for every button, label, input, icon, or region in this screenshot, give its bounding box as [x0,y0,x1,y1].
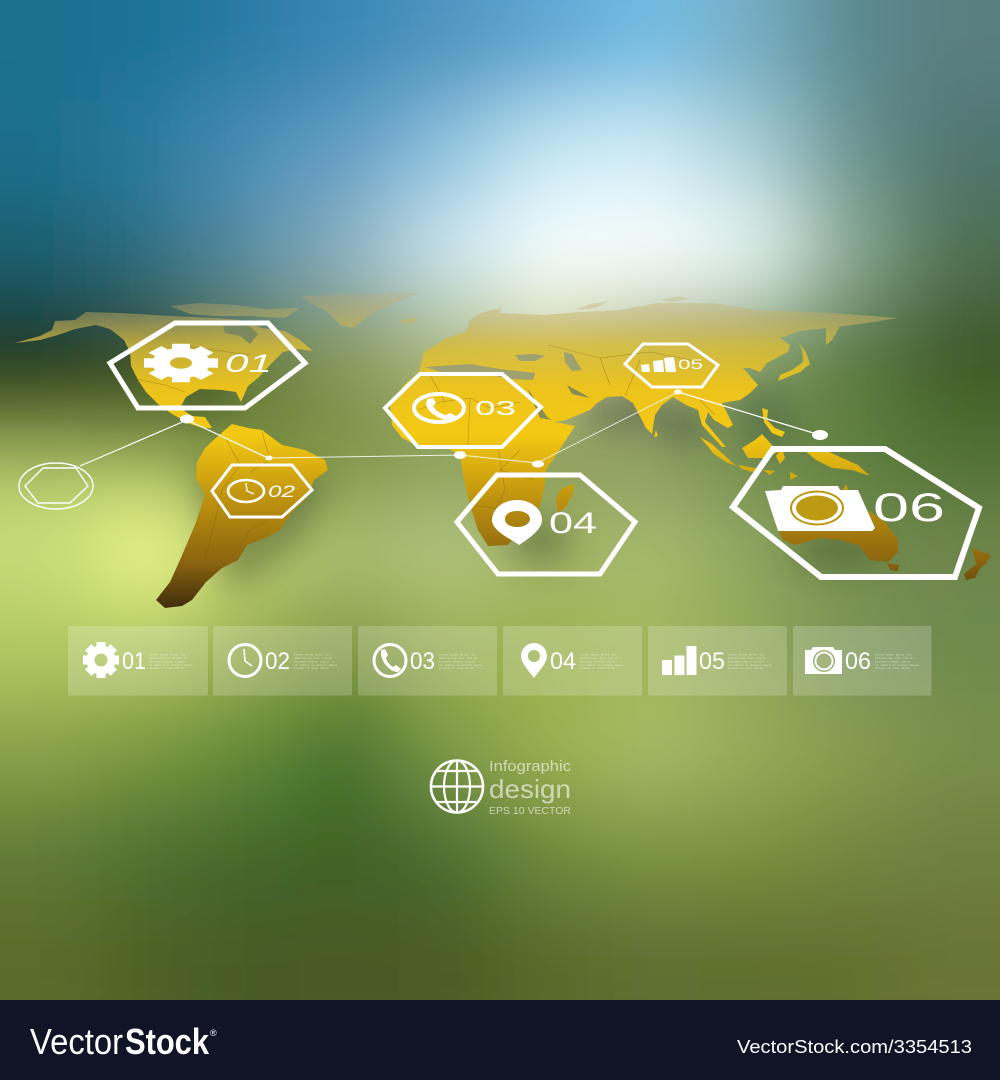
lorem text [875,652,919,670]
lorem text [294,652,338,670]
inland seas [222,322,590,420]
icon: camera [805,647,842,674]
panel: legend 02 [213,626,352,696]
icon: gear [83,642,119,678]
logo: Vector [30,1021,123,1062]
lorem text: Lorem ipsum dolor sit [580,652,617,656]
hexagon 06 [733,449,979,577]
world map shadow [181,385,881,590]
lorem text: aliqua ut enim minim [875,666,910,670]
hexagon 05 [625,344,718,387]
lorem text: Eiusmod tempor incid [875,660,910,664]
footer bar [0,1000,1000,1080]
panel: legend 05: 05 [699,648,725,675]
hexagon 02 [212,465,312,517]
hexagon 05: 05 [678,357,703,372]
icon: map pin [521,643,547,678]
lorem text: Eiusmod tempor incid [294,660,329,664]
lorem text: Adipiscing elit sed do [149,656,187,660]
icon: clock [228,480,264,502]
panel: legend 02: 02 [265,648,290,675]
logo: ® [210,1028,217,1038]
lorem text: Eiusmod tempor incid [580,660,615,664]
icon: globe [431,760,483,812]
lorem text: Eiusmod tempor incid [149,660,184,664]
lorem text [580,652,624,670]
panel: legend 04: 04 [550,648,576,675]
icon: phone [374,644,406,676]
hexagon 01: 01 [225,350,272,378]
brand text: EPS 10 VECTOR [489,806,571,817]
brand text [489,758,572,817]
icon: bars [662,646,696,675]
hexagon 03: 03 [475,398,516,420]
empty ring marker [19,463,93,509]
connector lines [80,392,820,466]
lorem text [439,652,483,670]
panel: legend 01: 01 [122,648,146,675]
lorem text: aliqua ut enim minim [728,666,763,670]
icon: camera [765,486,875,531]
lorem text: Eiusmod tempor incid [728,660,763,664]
lorem text: Adipiscing elit sed do [294,656,332,660]
lorem text: aliqua ut enim minim [149,666,184,670]
panel: legend 01 [68,626,208,696]
world map [15,293,991,608]
lorem text [149,652,193,670]
lorem text: ut labore et dolore magna [149,663,193,667]
lorem text: Adipiscing elit sed do [439,656,477,660]
lorem text: aliqua ut enim minim [580,666,615,670]
brand text: Infographic [489,758,572,775]
lorem text: Adipiscing elit sed do [875,656,913,660]
lorem text: Eiusmod tempor incid [439,660,474,664]
panel: legend 05 [648,626,787,696]
hexagon 04: 04 [549,507,597,540]
icon: phone [414,394,464,422]
hexagon 03 [385,374,541,447]
brand text: design [489,774,571,804]
lorem text: Lorem ipsum dolor sit [439,652,476,656]
hexagon 02: 02 [268,482,296,501]
lorem text: Adipiscing elit sed do [728,656,766,660]
hexagon 04 [457,475,635,574]
panel: legend 03 [358,626,497,696]
panel: legend 04 [503,626,642,696]
logo [30,1021,217,1062]
panel: legend 06 [793,626,932,696]
lorem text: ut labore et dolore magna [294,663,338,667]
lorem text [728,652,772,670]
lorem text: Lorem ipsum dolor sit [149,652,186,656]
lorem text: aliqua ut enim minim [439,666,474,670]
lorem text: ut labore et dolore magna [875,663,919,667]
lorem text: Lorem ipsum dolor sit [875,652,912,656]
lorem text: ut labore et dolore magna [439,663,483,667]
image id: VectorStock.com/3354513 [737,1037,972,1057]
icon: bars [641,357,676,372]
lorem text: ut labore et dolore magna [728,663,772,667]
logo: Stock [125,1021,210,1062]
lorem text: Lorem ipsum dolor sit [728,652,765,656]
hexagon 06: 06 [873,486,945,530]
lorem text: Adipiscing elit sed do [580,656,618,660]
panel: legend 03: 03 [410,648,435,675]
connector nodes [180,390,828,468]
icon: map pin [492,500,542,545]
country borders [136,345,715,560]
hexagon 01 [110,323,305,408]
lorem text: ut labore et dolore magna [580,663,624,667]
panel: legend 06: 06 [845,648,871,675]
icon: clock [229,644,261,676]
lorem text: Lorem ipsum dolor sit [294,652,331,656]
icon: gear [144,344,218,382]
lorem text: aliqua ut enim minim [294,666,329,670]
